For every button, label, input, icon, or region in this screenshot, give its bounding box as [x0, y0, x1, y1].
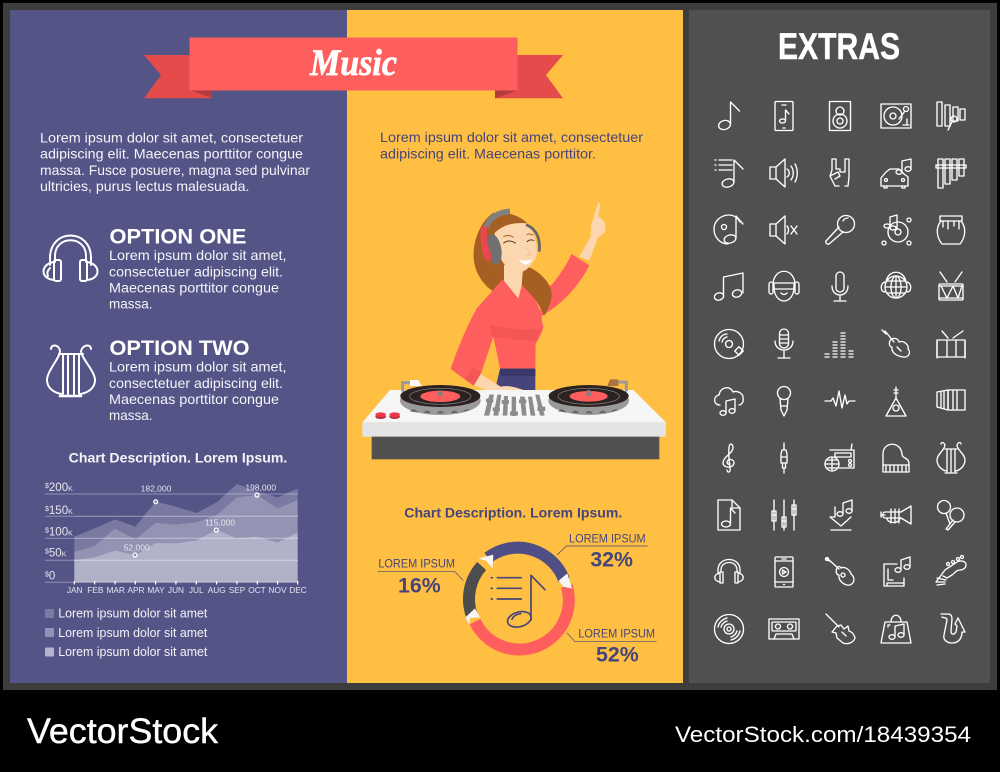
callout 52 percent — [567, 627, 657, 667]
panel: purple left column — [10, 10, 347, 683]
icon: balalaika — [886, 387, 906, 416]
icon: vinyl disc — [714, 330, 744, 358]
title: Music — [309, 43, 397, 84]
icon: studio microphone — [832, 272, 848, 301]
icon: radio — [825, 444, 854, 471]
hair back — [474, 213, 507, 292]
icon: note with list — [715, 160, 743, 188]
skirt — [495, 369, 535, 390]
icon: bass guitar head — [936, 556, 966, 585]
icon: acoustic guitar — [826, 558, 854, 585]
icon grid — [714, 102, 966, 644]
watermark left: VectorStock — [27, 712, 219, 751]
right turntable — [548, 385, 629, 415]
icon: disc with note — [714, 215, 743, 244]
watermark right: VectorStock.com/18439354 — [675, 722, 971, 747]
icon: lyre small — [937, 443, 965, 473]
icon: saxophone — [941, 614, 965, 643]
icon: loudspeaker box — [830, 102, 850, 130]
icon: rock hand — [830, 159, 849, 186]
icon: retro microphone — [775, 329, 793, 358]
left hand — [474, 374, 532, 398]
area chart — [45, 482, 307, 595]
x axis month labels: APR — [127, 585, 145, 595]
option two block: OPTION TWO — [110, 337, 250, 360]
icon: speaker loud — [770, 159, 797, 187]
icon: hand microphone — [778, 386, 790, 416]
icon: violin — [882, 330, 909, 357]
y axis labels: 0 — [49, 571, 55, 583]
data value labels: 198,000 — [245, 483, 276, 493]
icon: globe headphones — [881, 272, 911, 298]
callout 16 percent — [378, 557, 463, 598]
y axis labels: $ — [45, 572, 49, 579]
extras heading: EXTRAS — [778, 26, 900, 67]
icon: speaker with note — [882, 215, 911, 245]
donut chart — [378, 531, 657, 667]
callout 32 percent: 32% — [590, 548, 633, 572]
illustration: DJ woman at turntables — [362, 203, 666, 459]
left turntable — [400, 385, 481, 415]
y axis labels: K — [68, 531, 73, 538]
chart title left: Chart Description. Lorem Ipsum. — [69, 450, 287, 466]
dj deck front — [362, 422, 666, 437]
y axis labels: 200 — [49, 482, 68, 494]
raised sleeve — [537, 254, 589, 316]
callout 16 percent: 16% — [398, 574, 441, 598]
option one block: Lorem ipsum dolor sit amet, — [109, 247, 286, 263]
icon: headphones small — [715, 560, 743, 583]
chart legend — [45, 607, 208, 659]
icon: music album — [884, 557, 910, 586]
icon: timpani drum — [937, 331, 965, 358]
title ribbon — [144, 38, 563, 98]
icon: microphone — [826, 216, 854, 244]
hair side tail over shirt — [522, 265, 552, 316]
segment: 32 percent blue — [488, 548, 564, 580]
icon: vinyl record — [714, 614, 744, 644]
icon: mixer sliders — [772, 500, 796, 530]
icon: headphones — [44, 236, 98, 281]
x axis month labels: JUL — [189, 585, 204, 595]
dj deck top — [362, 390, 666, 422]
intro text centre — [380, 129, 643, 161]
callout 52 percent: LOREM IPSUM — [578, 627, 655, 641]
icon: music note — [718, 102, 740, 131]
option one block: Maecenas porttitor congue — [109, 280, 279, 296]
icon: music file — [718, 500, 740, 530]
option one block: consectetuer adipiscing elit. — [109, 263, 283, 279]
x axis month labels: SEP — [229, 585, 246, 595]
face — [494, 223, 537, 273]
icon: dj with headphones — [769, 271, 799, 301]
icon: two notes — [714, 273, 743, 301]
data point markers — [133, 493, 259, 557]
data value labels: 115,000 — [205, 518, 235, 528]
callout 16 percent: LOREM IPSUM — [378, 557, 455, 571]
data value labels: 52,000 — [124, 543, 150, 553]
option two block: consectetuer adipiscing elit. — [109, 375, 283, 391]
icon: cassette — [769, 619, 799, 639]
option one block: massa. — [109, 296, 152, 312]
option two block: Maecenas porttitor congue — [109, 391, 279, 407]
mixer faders — [484, 395, 545, 416]
x axis month labels: OCT — [248, 585, 266, 595]
y axis labels: 50 — [49, 548, 62, 560]
icon: treble clef — [723, 444, 734, 472]
y axis labels — [45, 482, 73, 583]
x axis month labels: NOV — [269, 585, 287, 595]
x axis month labels: AUG — [208, 585, 226, 595]
icon: music bag — [881, 615, 911, 643]
icon: lyre — [47, 345, 95, 396]
option two block: massa. — [109, 407, 152, 423]
icon: maracas — [938, 500, 964, 530]
y axis labels: $ — [45, 549, 49, 556]
option one block: OPTION ONE — [110, 226, 246, 248]
y axis labels: K — [68, 509, 73, 516]
icon: audio jack — [781, 443, 787, 473]
icon: speaker mute — [770, 216, 797, 244]
y axis labels: $ — [45, 506, 49, 513]
option two block — [109, 337, 286, 423]
icon: marimba — [936, 159, 966, 188]
intro text left: adipiscing elit. Maecenas porttitor congue — [40, 146, 303, 162]
option one block — [109, 226, 286, 312]
icon: equalizer bars — [825, 333, 853, 357]
segment: 16 percent dark — [469, 566, 482, 615]
chart title centre: Chart Description. Lorem Ipsum. — [404, 505, 622, 521]
icon: snare drum — [939, 272, 963, 300]
chart legend: Lorem ipsum dolor sit amet — [58, 607, 208, 621]
y axis labels: 150 — [49, 505, 68, 517]
icon: phone with note — [775, 102, 793, 130]
callout 32 percent: LOREM IPSUM — [569, 531, 646, 545]
icon: cloud music — [715, 388, 743, 415]
icon: record player — [881, 104, 911, 128]
x axis month labels: MAR — [106, 585, 125, 595]
dj deck base — [372, 437, 659, 459]
icon: sound wave — [825, 391, 855, 408]
ear cup — [484, 233, 504, 266]
y axis labels: K — [62, 552, 67, 559]
torso and left arm — [451, 279, 543, 386]
x axis month labels: JUN — [168, 585, 184, 595]
icon: car with notes — [881, 159, 911, 188]
red buttons — [375, 412, 400, 419]
raised forearm and hand — [579, 203, 606, 261]
headphone band — [486, 211, 510, 227]
intro text left: massa. Fusce posuere, magna sed pulvinar — [40, 162, 310, 178]
left tone arm — [403, 383, 410, 392]
panel: yellow centre column — [347, 10, 683, 683]
x axis month labels: DEC — [289, 585, 307, 595]
panel: dark extras column — [689, 10, 990, 683]
callout 32 percent — [557, 531, 648, 572]
data value labels — [124, 483, 276, 553]
icon: electric guitar — [826, 614, 855, 644]
intro text centre: Lorem ipsum dolor sit amet, consectetuer — [380, 129, 643, 145]
neck — [504, 265, 526, 300]
intro text left — [40, 130, 310, 194]
icon: conga drum — [937, 216, 965, 244]
callout 52 percent: 52% — [596, 643, 639, 667]
icon: xylophone — [937, 102, 965, 130]
y axis labels: 100 — [49, 527, 68, 539]
icon: download music — [830, 500, 852, 530]
icon: grand piano — [883, 444, 909, 472]
segment arrowheads — [465, 555, 572, 625]
y axis labels: K — [68, 486, 73, 493]
chart legend: Lorem ipsum dolor sit amet — [58, 645, 208, 659]
smile eyes and mouth — [503, 240, 534, 243]
icon: music note list — [491, 575, 545, 630]
data value labels: 182,000 — [141, 484, 172, 494]
segment: 52 percent red — [475, 586, 569, 650]
intro text left: Lorem ipsum dolor sit amet, consectetuer — [40, 130, 303, 146]
icon: trumpet — [881, 506, 911, 524]
y axis labels: $ — [45, 528, 49, 535]
option two block: Lorem ipsum dolor sit amet, — [109, 359, 286, 375]
x axis month labels: JAN — [67, 585, 83, 595]
hair front — [485, 214, 527, 237]
icon: phone with play — [775, 557, 793, 587]
right tone arm — [618, 382, 626, 392]
x axis month labels — [67, 585, 307, 595]
x axis month labels: FEB — [87, 585, 104, 595]
intro text left: ultricies, purus lectus malesuada. — [40, 178, 250, 194]
x axis month labels: MAY — [147, 585, 165, 595]
intro text centre: adipiscing elit. Maecenas porttitor. — [380, 145, 596, 161]
y axis labels: $ — [45, 483, 49, 490]
icon: accordion — [937, 390, 965, 410]
chart axis ticks — [74, 581, 298, 584]
chart legend: Lorem ipsum dolor sit amet — [58, 626, 208, 640]
